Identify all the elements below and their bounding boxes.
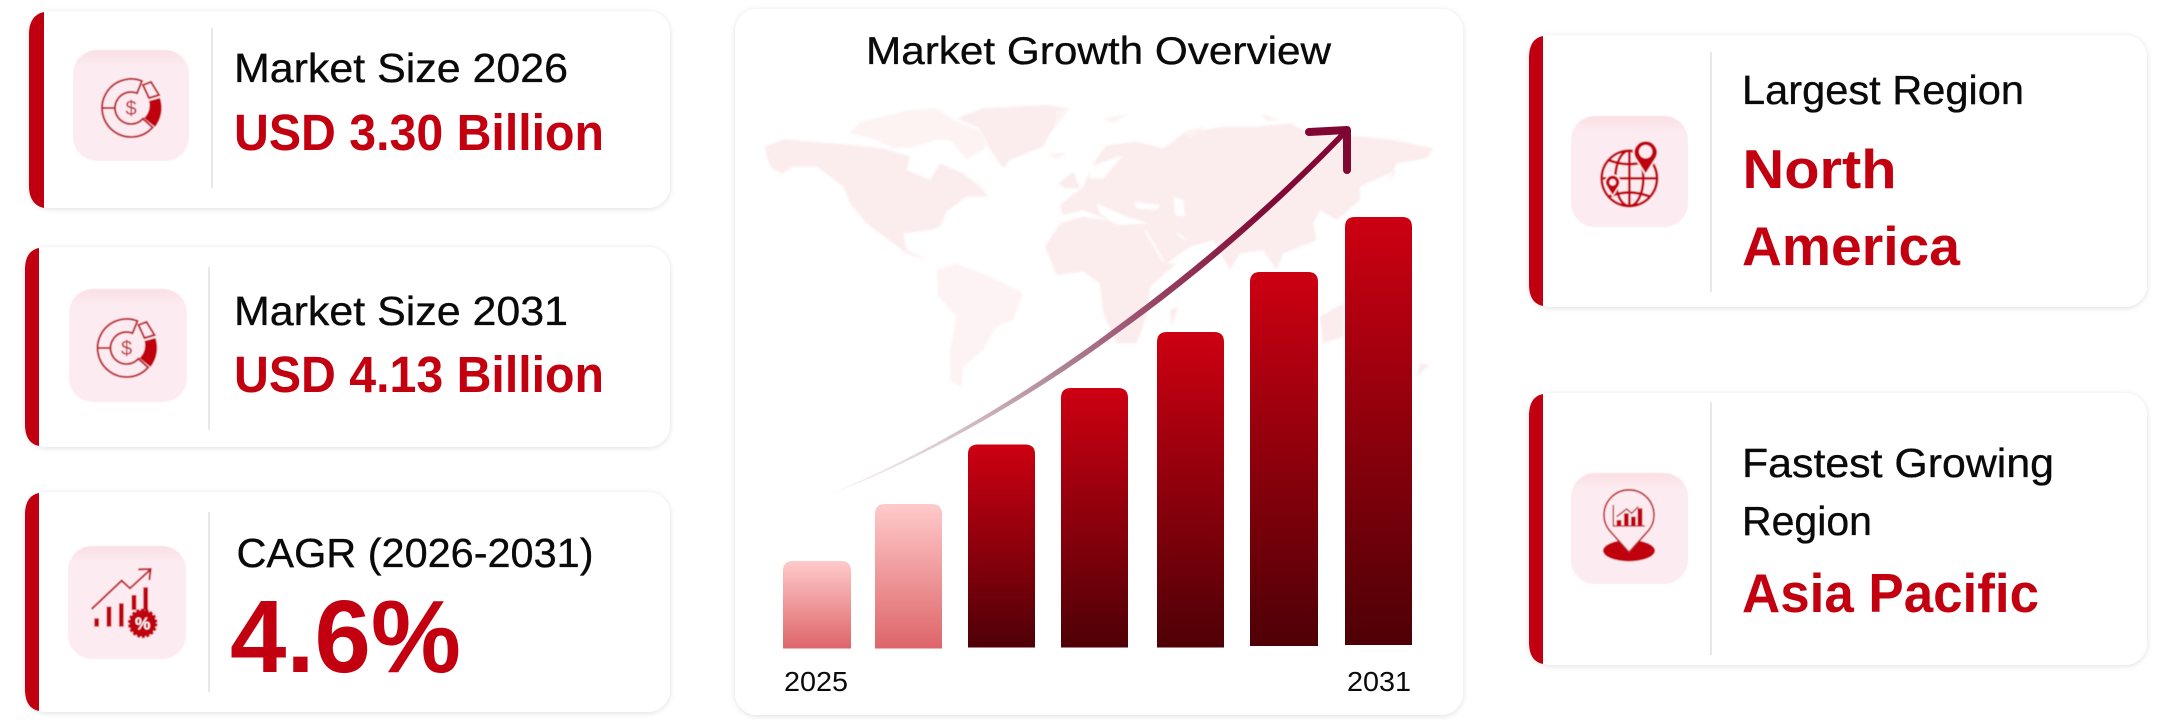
card background <box>1529 393 2147 665</box>
panel: CAGR <box>25 492 670 712</box>
value: USD 3.30 Billion <box>234 104 604 161</box>
icon tile: growth chart with percent badge: % <box>135 613 150 633</box>
red accent bar <box>29 12 44 208</box>
growth arrow <box>820 128 1349 498</box>
axis label 2031: 2031 <box>1347 666 1411 697</box>
icon tile: growth chart with percent badge <box>68 546 186 659</box>
card background <box>735 9 1463 715</box>
card background <box>25 492 670 712</box>
card background <box>25 247 670 447</box>
icon tile: location pin with chart <box>1571 473 1688 584</box>
value line 2: America <box>1742 215 1960 277</box>
icon tile: donut chart with dollar <box>73 50 189 161</box>
axis label 2025: 2025 <box>784 666 848 697</box>
label: Market Size 2031 <box>234 288 568 334</box>
icon tile: donut chart with dollar: $ <box>125 98 137 120</box>
red accent bar <box>25 493 39 711</box>
card background <box>1529 35 2147 307</box>
panel: market size 2031 <box>25 247 670 447</box>
panel: market size 2026 <box>29 11 670 208</box>
red accent bar <box>1529 394 1543 664</box>
icon tile: donut chart with dollar <box>69 289 187 402</box>
world map <box>760 105 1433 388</box>
red accent bar <box>1529 36 1543 306</box>
label line 1: Fastest Growing <box>1742 440 2054 486</box>
label: CAGR (2026-2031) <box>236 530 594 576</box>
value: Asia Pacific <box>1742 562 2039 624</box>
icon tile: donut chart with dollar: $ <box>121 338 132 360</box>
title: Market Growth Overview <box>866 30 1332 73</box>
label: Largest Region <box>1742 67 2024 113</box>
bar chart <box>783 217 1412 648</box>
red accent bar <box>25 248 39 446</box>
icon tile: globe with location pins <box>1571 116 1688 227</box>
panel: market growth overview <box>735 9 1463 715</box>
card background <box>29 11 670 208</box>
value line 1: North <box>1742 138 1896 200</box>
label: Market Size 2026 <box>234 45 568 91</box>
value: 4.6% <box>230 579 461 694</box>
value: USD 4.13 Billion <box>234 346 604 403</box>
panel: fastest growing region <box>1529 393 2147 665</box>
panel: largest region <box>1529 35 2147 307</box>
label line 2: Region <box>1742 498 1872 544</box>
